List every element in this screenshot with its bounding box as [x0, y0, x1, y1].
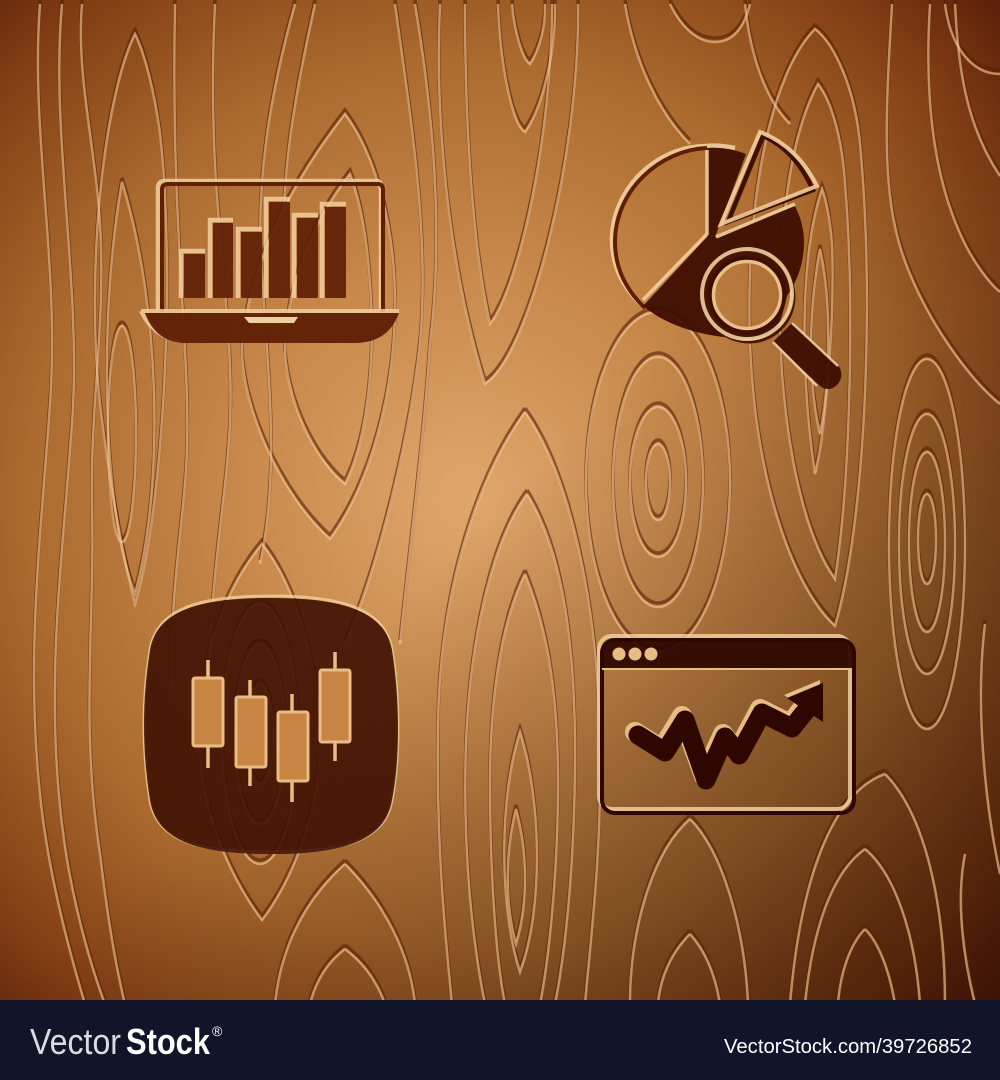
VectorStock logo: ® [212, 1023, 223, 1039]
footer bar [0, 1000, 1000, 1080]
candlestick 2 [236, 680, 266, 786]
candlestick 1 [193, 660, 223, 768]
icon: pie chart with magnifying glass [612, 132, 841, 389]
VectorStock logo: VectorStock [30, 1021, 224, 1062]
icon: candlestick chart in rounded square [144, 596, 398, 854]
candlestick 4 [320, 652, 350, 761]
icon: laptop with bar chart [141, 181, 399, 343]
image id: VectorStock.com/39726852 [724, 1036, 972, 1058]
candlestick 3 [278, 694, 308, 802]
rising arrow [635, 680, 823, 780]
window dots [612, 648, 658, 660]
icon: browser window with rising chart [599, 636, 854, 813]
